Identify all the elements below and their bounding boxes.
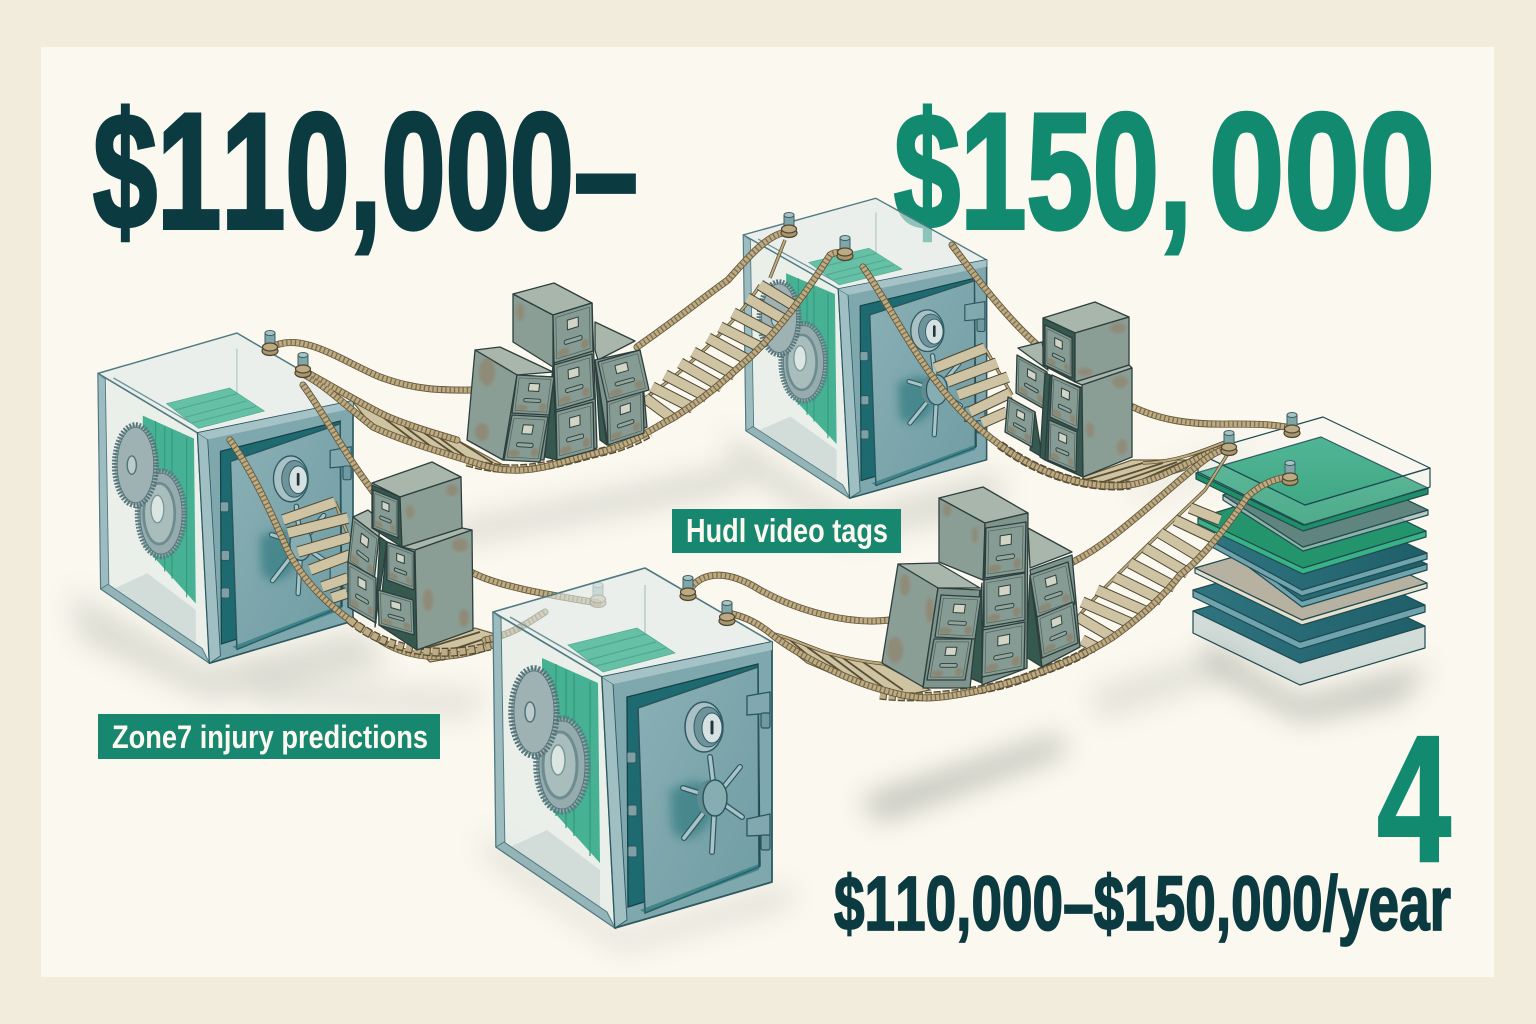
rope bridge: safe left to safe bottom: [230, 385, 598, 656]
stat number: 4: [1377, 699, 1451, 900]
safe: top: [743, 198, 987, 498]
planks on all bridges: [283, 240, 1229, 697]
filing cabinets: lower right group: [882, 487, 1080, 688]
label: Zone7 injury predictions: [98, 714, 440, 759]
floor shadows: [70, 430, 1430, 950]
layered plate stack: [1193, 417, 1430, 685]
posts: [262, 212, 1300, 626]
filing cabinets: left lower group: [348, 462, 473, 650]
filing cabinets: right upper group: [1005, 302, 1132, 477]
ropes: top bridges and lower right bridge: [270, 232, 1292, 698]
grazing-angle bridge decks: [353, 402, 1205, 695]
safe: bottom: [493, 568, 772, 928]
safe: left: [98, 333, 353, 663]
ghost post seen through glass: [590, 582, 606, 608]
label: Zone7 injury predictions: Zone7 injury predictions: [112, 719, 428, 755]
filing cabinets: top left group: [467, 283, 649, 462]
headline: high figure: 000: [1209, 79, 1435, 263]
headline: high figure: $150,: [894, 79, 1192, 263]
headline: low figure: $110,000–: [93, 79, 638, 263]
label: Hudl video tags: Hudl video tags: [686, 512, 888, 549]
